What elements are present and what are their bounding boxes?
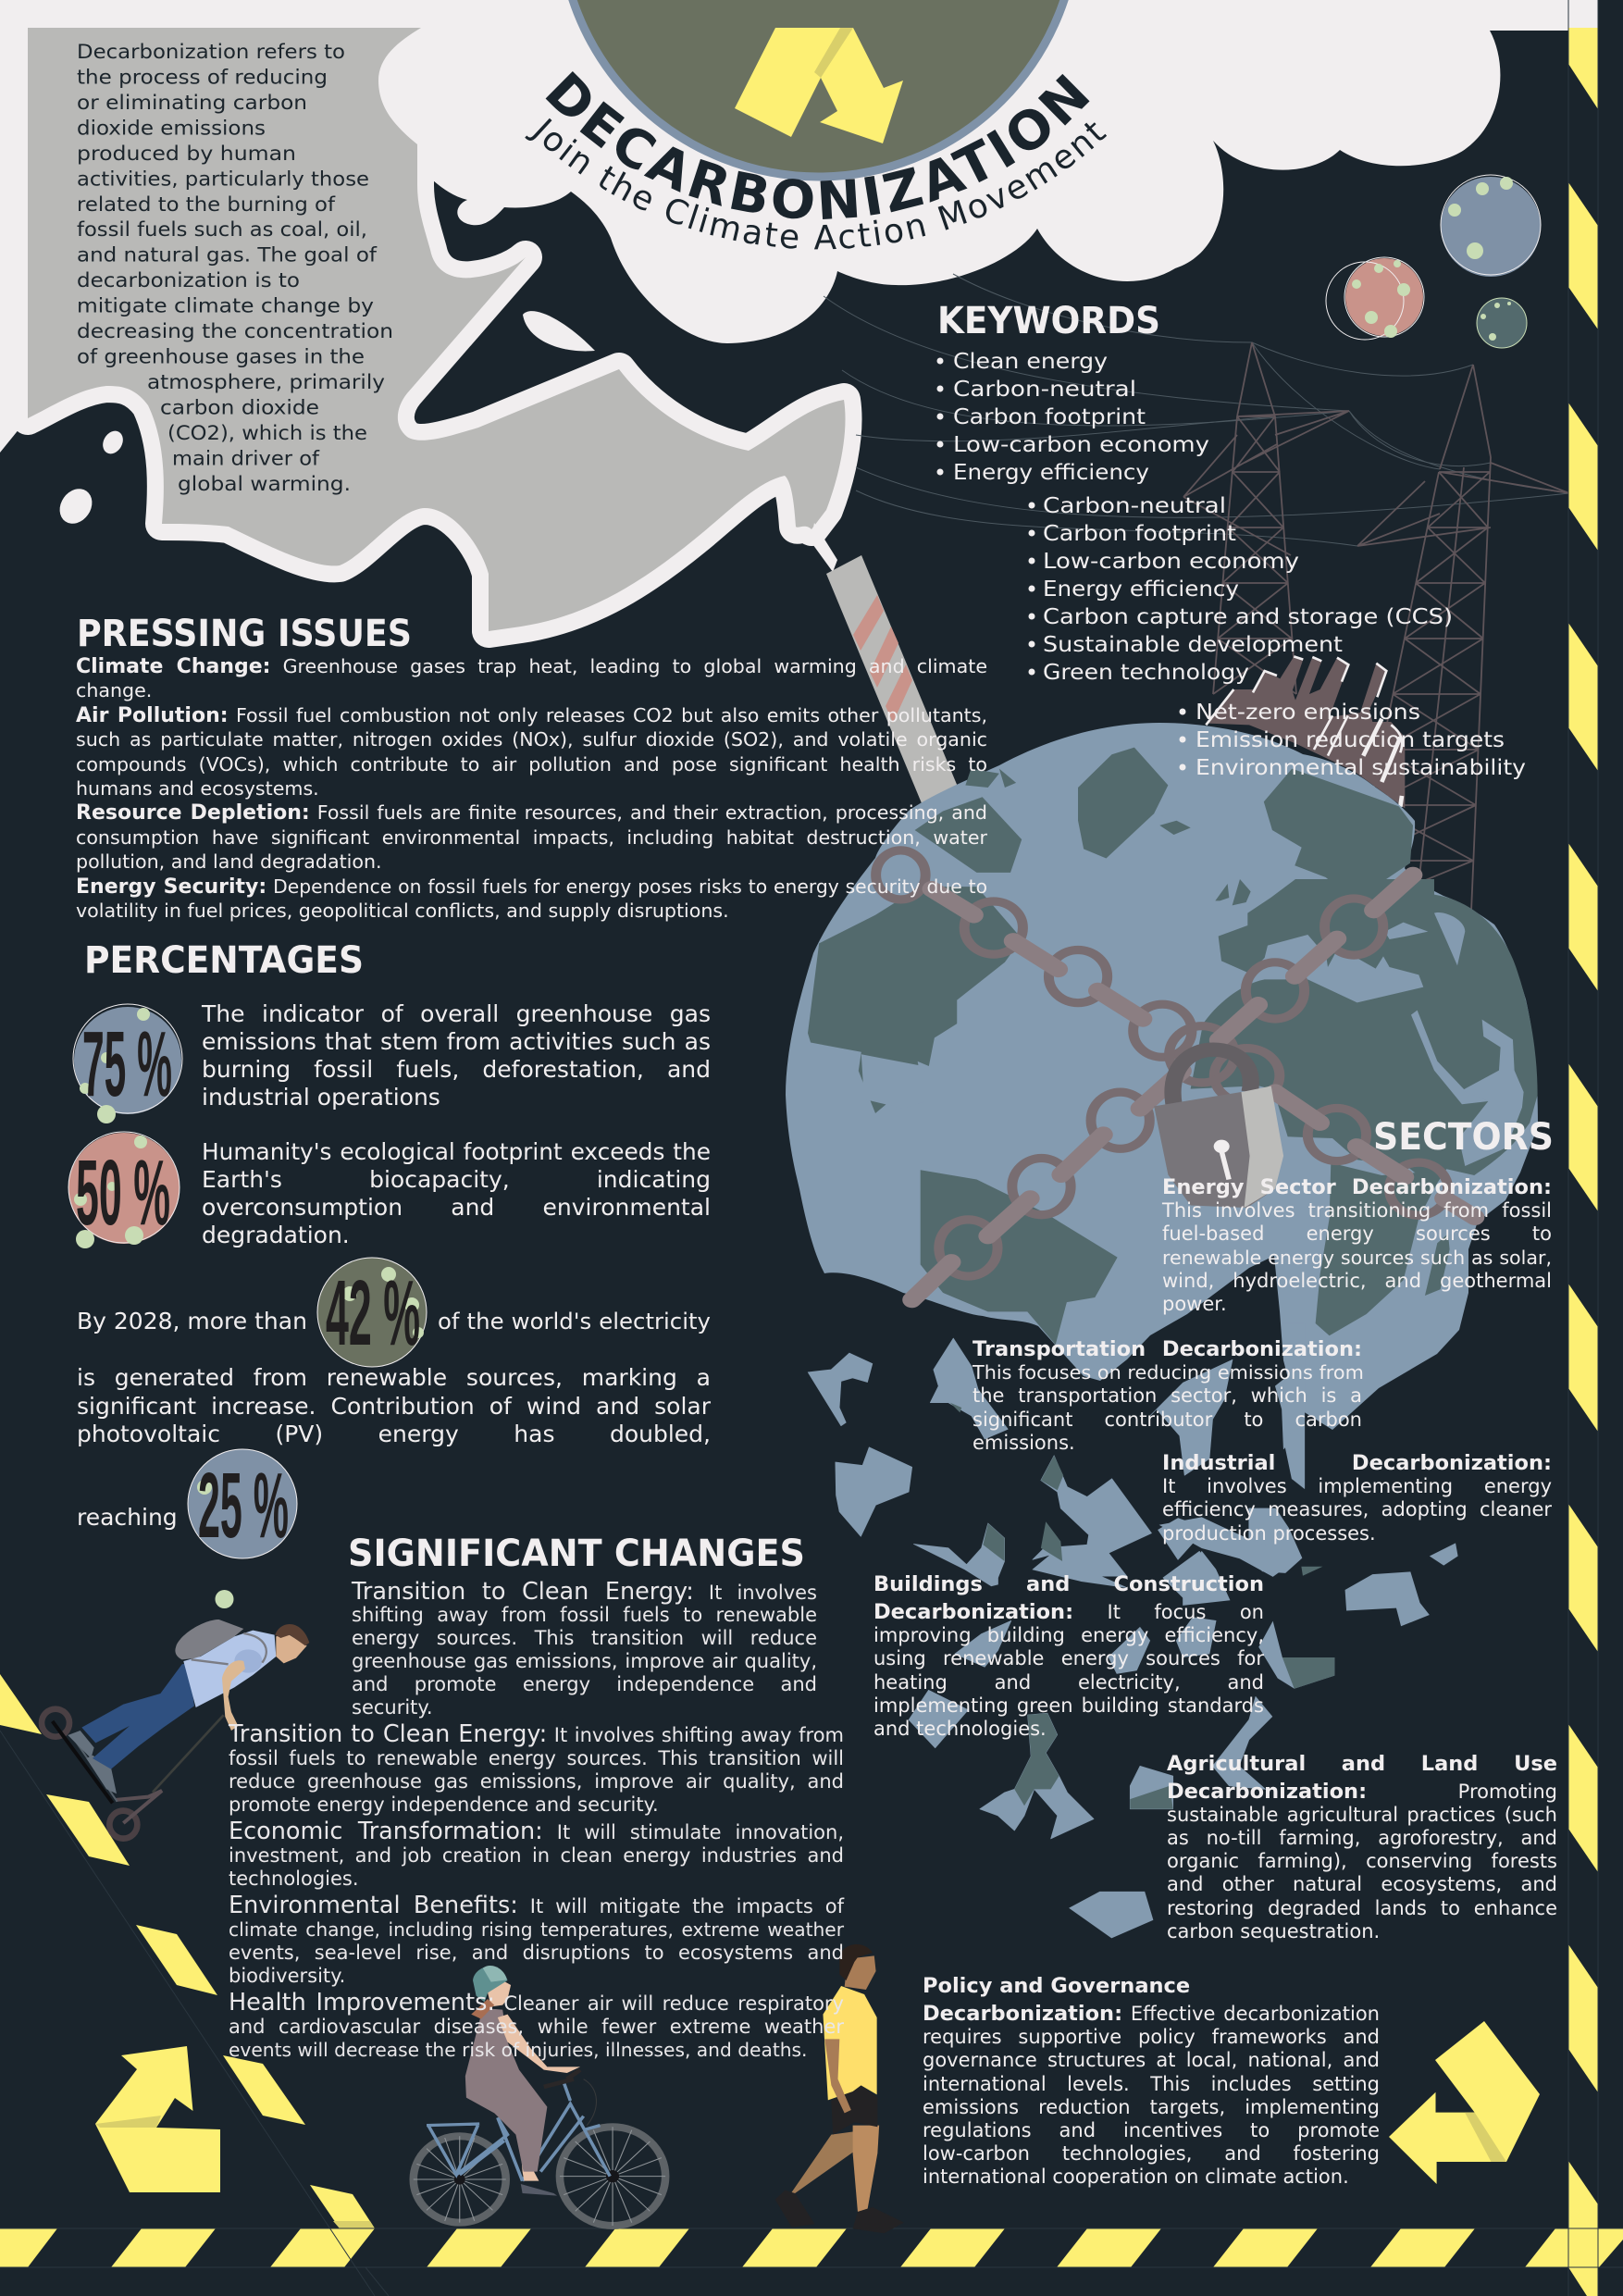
chimney <box>826 555 958 814</box>
text: transportation: the transportation sector, which is a <box>973 1384 1362 1407</box>
intro text: of greenhouse gases in the <box>77 346 365 368</box>
globe <box>786 723 1538 1430</box>
title badge: green semicircle <box>559 0 1077 177</box>
text: industrial: production processes. <box>1162 1522 1376 1545</box>
text: policy: low-carbon technologies, and fostering <box>923 2142 1380 2165</box>
hazard tape: diagonal <box>0 1674 375 2228</box>
person on scooter <box>42 1620 309 1839</box>
text: energy sector: power. <box>1162 1293 1227 1315</box>
text: energy sector <box>1162 1175 1552 1315</box>
pylons <box>1183 342 1569 912</box>
intro text: and natural gas. The goal of <box>77 244 378 267</box>
chains and padlock <box>876 850 1475 1300</box>
text: energy sector: This involves transitioning from fossil <box>1162 1199 1552 1222</box>
circle: 75% <box>73 1004 182 1123</box>
intro text: decarbonization is to <box>77 269 300 292</box>
text: pressing issues: Energy Security: Dependence on fossil fuels for energy poses risks to energy security due to <box>76 875 987 899</box>
text: significant changes intro: and promote energy independence and <box>352 1673 817 1695</box>
intro text: fossil fuels such as coal, oil, <box>77 218 367 241</box>
text: significant changes details <box>228 1720 844 2061</box>
icon: raised fist <box>1206 656 1405 808</box>
keyword list one: Low-carbon economy <box>953 433 1209 457</box>
text: buildings: Decarbonization: It focus on <box>873 1600 1264 1624</box>
text: percentage two: degradation. <box>202 1222 350 1248</box>
text: pressing issues: Resource Depletion: Fossil fuels are finite resources, and their extraction, processing, and <box>76 801 987 825</box>
text: agriculture: sustainable agricultural practices (such <box>1167 1804 1557 1826</box>
heading: significant changes: SIGNIFICANT CHANGES <box>348 1533 805 1575</box>
text: significant changes details: Health Improvements: Cleaner air will reduce respiratory <box>229 1989 844 2017</box>
illustration layer: 75 % <box>82 1012 172 1116</box>
text: pressing issues <box>76 655 987 922</box>
intro text <box>77 41 393 495</box>
text: significant changes intro: security. <box>352 1696 433 1719</box>
text: policy: regulations and incentives to promote <box>923 2119 1380 2141</box>
text: buildings <box>873 1572 1264 1740</box>
text: percentage three continued: is generated from renewable sources, marking a <box>77 1364 711 1391</box>
text: buildings: using renewable energy sources for <box>873 1647 1264 1669</box>
keyword list three <box>1179 701 1526 780</box>
text: buildings: and technologies. <box>873 1718 1047 1740</box>
text: pressing issues: change. <box>76 679 152 701</box>
text: transportation <box>972 1337 1364 1454</box>
continents east <box>1191 879 1538 1335</box>
illustration layer: 42 % <box>326 1261 420 1365</box>
text: significant changes details: events, sea-level rise, and disruptions to ecosystems and <box>229 1942 844 1964</box>
text: policy: Decarbonization: Effective decarbonization <box>923 2002 1380 2026</box>
keyword list one: Carbon-neutral <box>953 378 1136 402</box>
subtitle: Join the Climate Action Movement <box>525 118 1107 250</box>
text: buildings: heating and electricity, and <box>873 1671 1264 1694</box>
keyword list three: Net-zero emissions <box>1196 701 1420 725</box>
text: pressing issues: volatility in fuel prices, geopolitical conflicts, and supply disruptions. <box>76 900 729 922</box>
illustration layer: 25 % <box>198 1454 289 1558</box>
text: significant changes intro: Transition to Clean Energy: It involves <box>352 1578 817 1606</box>
title: DECARBONIZATION <box>546 71 1090 219</box>
text: policy: Policy and Governance <box>923 1974 1190 1998</box>
intro text: decreasing the concentration <box>77 320 393 342</box>
text: pressing issues: Air Pollution: Fossil fuel combustion not only releases CO2 but also emits other pollutants, <box>76 704 987 727</box>
text: percentage three continued <box>77 1364 711 1447</box>
cyclist <box>414 1966 665 2226</box>
text: buildings: improving building energy efficiency, <box>873 1624 1264 1646</box>
text: pressing issues: pollution, and land degradation. <box>76 850 382 873</box>
text: energy sector: wind, hydroelectric, and geothermal <box>1162 1270 1552 1292</box>
padlock <box>1154 1049 1283 1208</box>
text: agriculture: organic farming), conserving forests <box>1167 1850 1557 1872</box>
walking person <box>775 1944 904 2233</box>
text: pressing issues: Climate Change: Greenhouse gases trap heat, leading to global warming and climate <box>76 655 987 678</box>
icon: recycling arrow top <box>735 28 903 143</box>
text: agriculture <box>1167 1752 1557 1942</box>
keyword list one <box>936 350 1209 485</box>
keyword list two <box>1029 494 1453 685</box>
text: industrial: It involves implementing energy <box>1162 1475 1552 1497</box>
text: policy <box>923 1974 1380 2188</box>
text: agriculture: carbon sequestration. <box>1167 1920 1380 1942</box>
text: transportation: This focuses on reducing emissions from <box>973 1361 1364 1384</box>
intro text: mitigate climate change by <box>77 295 374 317</box>
intro text: atmosphere, primarily <box>147 371 385 393</box>
illustration layer: 50 % <box>76 1141 170 1245</box>
intro text: the process of reducing <box>77 67 328 89</box>
bubbles top right <box>1326 175 1541 348</box>
text: percentage three continued: significant increase. Contribution of wind and solar <box>77 1392 711 1420</box>
text: industrial: efficiency measures, adopting cleaner <box>1162 1498 1552 1520</box>
text: agriculture: Decarbonization: Promoting <box>1167 1780 1557 1804</box>
smoke droplets <box>53 311 837 572</box>
text: policy: requires supportive policy frameworks and <box>923 2026 1380 2048</box>
power lines <box>824 274 1569 546</box>
intro text: related to the burning of <box>77 193 336 216</box>
hazard tape: bottom <box>0 2228 1623 2267</box>
intro text: or eliminating carbon <box>77 92 307 114</box>
circle: 25% <box>188 1449 297 1558</box>
text: percentage three continued: photovoltaic (PV) energy has doubled, <box>77 1421 711 1447</box>
text: significant changes details: and cardiovascular diseases, while fewer extreme weather <box>229 2016 844 2038</box>
panel: cloud <box>0 0 1598 453</box>
intro text: (CO2), which is the <box>167 422 367 444</box>
text: percentage two: Humanity's ecological footprint exceeds the <box>202 1138 711 1165</box>
intro text: activities, particularly those <box>77 168 369 190</box>
keyword list one: Energy efficiency <box>953 461 1149 485</box>
keyword list two: Green technology <box>1043 661 1249 685</box>
text: significant changes details: technologies. <box>229 1868 359 1890</box>
text: pressing issues: consumption have significant environmental impacts, including habitat destruction, water <box>76 826 987 849</box>
intro text: produced by human <box>77 143 296 165</box>
text: percentage two: Earth's biocapacity, indicating <box>202 1166 711 1193</box>
text: energy sector: fuel-based energy sources to <box>1162 1222 1552 1245</box>
globe fragments <box>808 1323 1458 1938</box>
intro text: main driver of <box>172 447 320 469</box>
heading: pressing issues: PRESSING ISSUES <box>77 613 412 655</box>
text: industrial <box>1162 1451 1552 1545</box>
text: pressing issues: compounds (VOCs), which contribute to air pollution and pose significant health risks to <box>76 753 987 776</box>
panel: smoke plume <box>28 28 846 631</box>
keyword list two: Carbon capture and storage (CCS) <box>1043 605 1453 629</box>
heading: sectors: SECTORS <box>1373 1116 1554 1159</box>
text: energy sector: renewable energy sources such as solar, <box>1162 1247 1552 1269</box>
text: policy: international cooperation on climate action. <box>923 2166 1349 2188</box>
text: significant changes details: fossil fuels to renewable energy sources. This transition will <box>229 1747 844 1769</box>
text: significant changes intro: energy sources. This transition will reduce <box>352 1627 817 1649</box>
text: policy: international levels. This includes setting <box>923 2073 1380 2095</box>
text: agriculture: as no-till farming, agroforestry, and <box>1167 1827 1557 1849</box>
heading: percentages: PERCENTAGES <box>84 939 364 982</box>
text: buildings: Buildings and Construction <box>873 1572 1264 1596</box>
intro text: Decarbonization refers to <box>77 41 345 63</box>
text: significant changes intro: greenhouse gas emissions, improve air quality, <box>352 1650 817 1672</box>
text: pressing issues: such as particulate matter, nitrogen oxides (NOx), sulfur dioxide (SO2), and volatile organic <box>76 728 987 751</box>
intro text: dioxide emissions <box>77 117 266 139</box>
text: significant changes intro: shifting away from fossil fuels to renewable <box>352 1604 817 1626</box>
text: significant changes details: reduce greenhouse gas emissions, improve air quality, and <box>229 1770 844 1793</box>
text: policy: emissions reduction targets, implementing <box>923 2096 1380 2118</box>
keyword list two: Carbon footprint <box>1043 522 1236 546</box>
icon: recycling arrow bottom right <box>1389 2021 1540 2184</box>
keyword list two: Sustainable development <box>1043 633 1343 657</box>
text: agriculture: restoring degraded lands to enhance <box>1167 1897 1557 1919</box>
icon: recycling arrow bottom left <box>95 2046 220 2192</box>
keyword list two: Low-carbon economy <box>1043 550 1299 574</box>
text: significant changes details: Economic Transformation: It will stimulate innovation, <box>229 1818 844 1845</box>
text: percentage two <box>202 1138 711 1248</box>
heading: keywords: KEYWORDS <box>937 300 1160 342</box>
hazard tape: right <box>1568 28 1598 2296</box>
text: significant changes details: events will decrease the risk of injuries, illnesses, and deaths. <box>229 2039 807 2061</box>
text: policy: governance structures at local, national, and <box>923 2049 1380 2071</box>
text: significant changes details: promote energy independence and security. <box>229 1793 659 1816</box>
text: percentage one: The indicator of overall greenhouse gas <box>202 1000 711 1027</box>
continents west <box>808 748 1413 1345</box>
text: energy sector: Energy Sector Decarbonization: <box>1162 1175 1552 1199</box>
lone bubble <box>215 1590 233 1608</box>
text: significant changes details: biodiversity. <box>229 1965 345 1987</box>
circle: 42% <box>317 1258 427 1367</box>
text: transportation: emissions. <box>973 1432 1075 1454</box>
text: percentage three tail: of the world's electricity <box>438 1308 711 1334</box>
text: significant changes details: Transition to Clean Energy: It involves shifting away from <box>229 1720 844 1748</box>
text: percentage one <box>202 1000 711 1111</box>
text: transportation: significant contributor to carbon <box>973 1409 1362 1431</box>
text: significant changes details: climate change, including rising temperatures, extreme weather <box>229 1918 844 1941</box>
text: agriculture: and other natural ecosystems, and <box>1167 1873 1557 1895</box>
keyword list one: Clean energy <box>953 350 1108 374</box>
text: industrial: Industrial Decarbonization: <box>1162 1451 1552 1475</box>
circle: 50% <box>68 1132 180 1248</box>
keyword list three: Environmental sustainability <box>1196 756 1526 780</box>
text: percentage one: emissions that stem from activities such as <box>202 1028 711 1055</box>
text: reaching: reaching <box>77 1504 178 1531</box>
text: percentage three lead: By 2028, more than <box>77 1308 307 1334</box>
intro text: global warming. <box>178 473 351 495</box>
text: significant changes intro <box>352 1578 817 1719</box>
text: significant changes details: investment, and job creation in clean energy industries and <box>229 1844 844 1867</box>
intro text: carbon dioxide <box>160 396 319 418</box>
text: agriculture: Agricultural and Land Use <box>1167 1752 1557 1776</box>
text: transportation: Transportation Decarbonization: <box>973 1337 1362 1361</box>
keyword list one: Carbon footprint <box>953 405 1146 429</box>
text: significant changes details: Environmental Benefits: It will mitigate the impacts of <box>229 1892 844 1919</box>
keyword list two: Carbon-neutral <box>1043 494 1226 518</box>
text: percentage one: industrial operations <box>202 1084 440 1111</box>
text: buildings: implementing green building standards <box>873 1694 1264 1717</box>
keyword list three: Emission reduction targets <box>1196 728 1505 752</box>
text: percentage one: burning fossil fuels, deforestation, and <box>202 1056 711 1083</box>
keyword list two: Energy efficiency <box>1043 577 1239 602</box>
text: pressing issues: humans and ecosystems. <box>76 777 319 800</box>
text: percentage two: overconsumption and environmental <box>202 1194 711 1221</box>
